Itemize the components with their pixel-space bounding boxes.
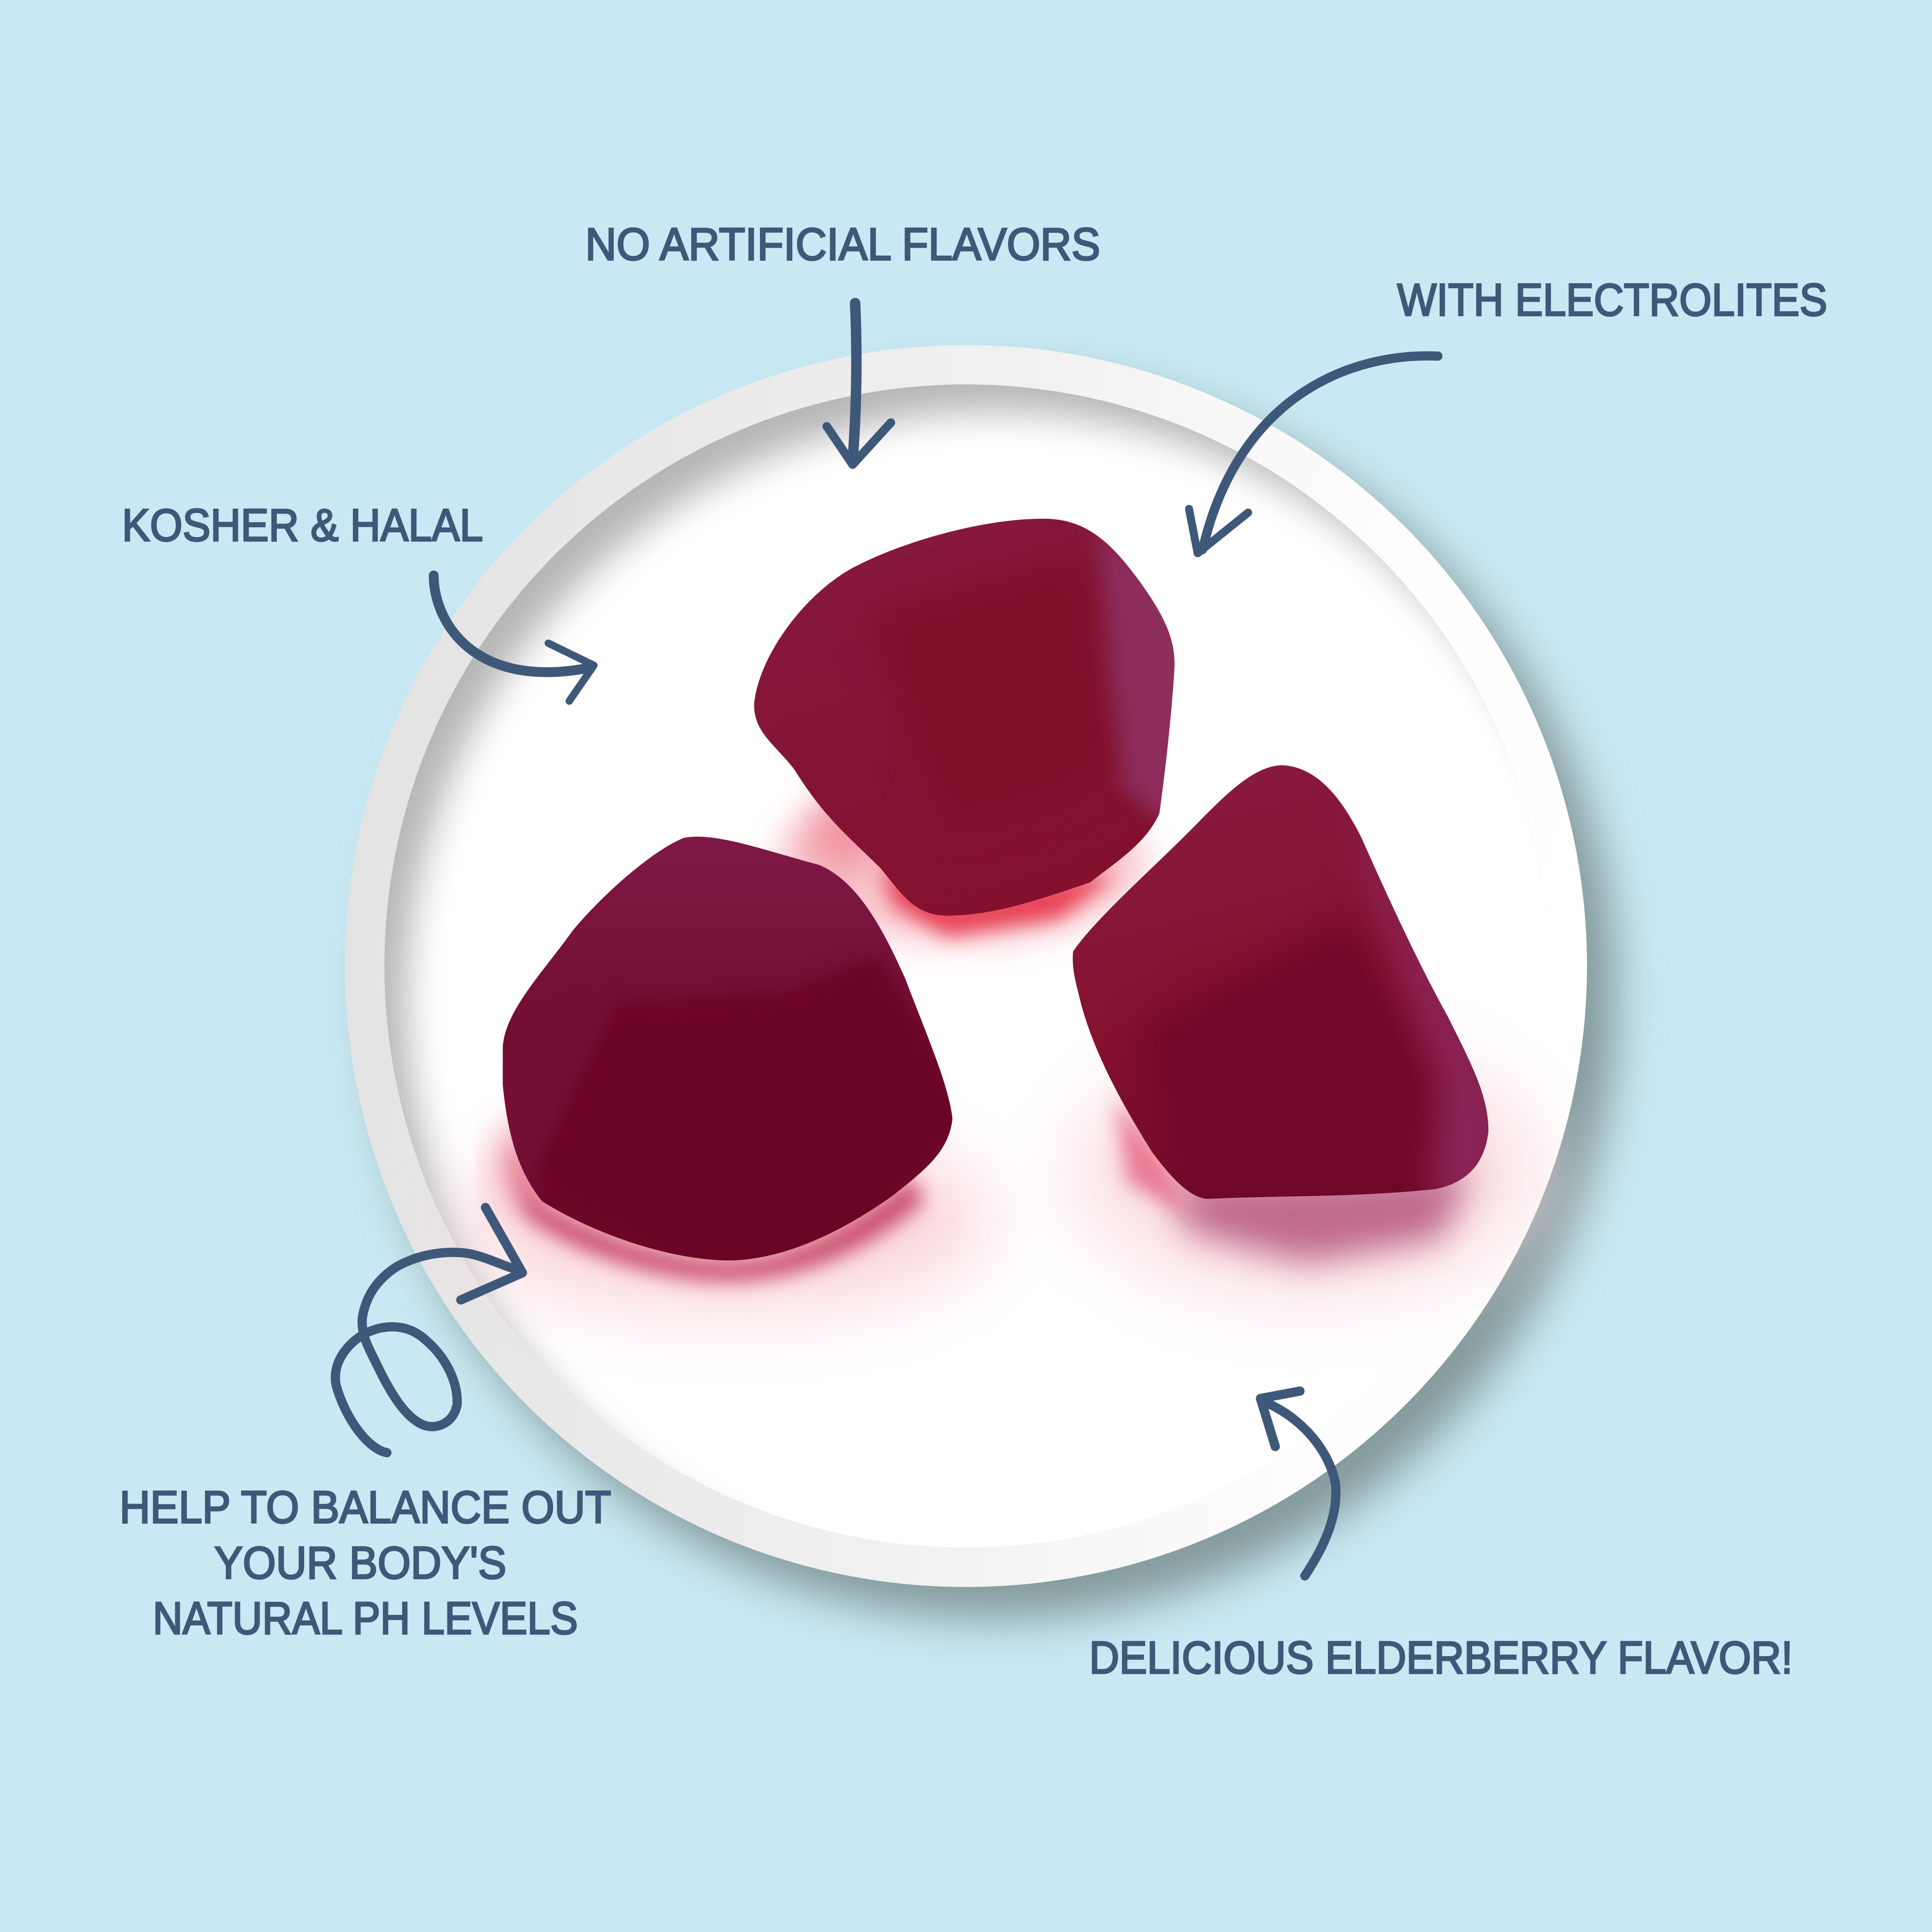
gummy: left [487, 826, 973, 1282]
label: help to balance: HELP TO BALANCE OUT [120, 1482, 611, 1533]
label: help to balance: YOUR BODY'S [214, 1537, 506, 1588]
label: no artificial flavors: NO ARTIFICIAL FLAVORS [585, 219, 1100, 270]
label: help to balance [120, 1482, 611, 1644]
gummy: right [1059, 752, 1509, 1226]
lower face [1140, 918, 1466, 1226]
gummy shadows [462, 783, 1540, 1312]
label: help to balance: NATURAL PH LEVELS [153, 1593, 578, 1644]
arrow: with electrolites [1189, 356, 1438, 553]
plate [345, 345, 1617, 1619]
arrow: kosher and halal [434, 575, 594, 701]
central facet [869, 555, 1109, 826]
label: kosher and halal: KOSHER & HALAL [122, 500, 483, 551]
plate rim [345, 345, 1587, 1587]
right facet [1092, 532, 1175, 823]
label: with electrolites: WITH ELECTROLITES [1397, 274, 1827, 325]
right edge [1343, 801, 1509, 1201]
plate drop shadow [375, 377, 1617, 1619]
gummy: top [754, 518, 1175, 916]
arrow: spiral to plate [335, 1207, 523, 1453]
arrow: delicious elderberry [1261, 1391, 1336, 1576]
lower facet [523, 955, 973, 1282]
label: delicious elderberry flavor: DELICIOUS ELDERBERRY FLAVOR! [1089, 1632, 1793, 1683]
left facet [487, 993, 610, 1207]
plate well [370, 370, 1585, 1589]
arrow: no artificial flavors [827, 303, 891, 465]
